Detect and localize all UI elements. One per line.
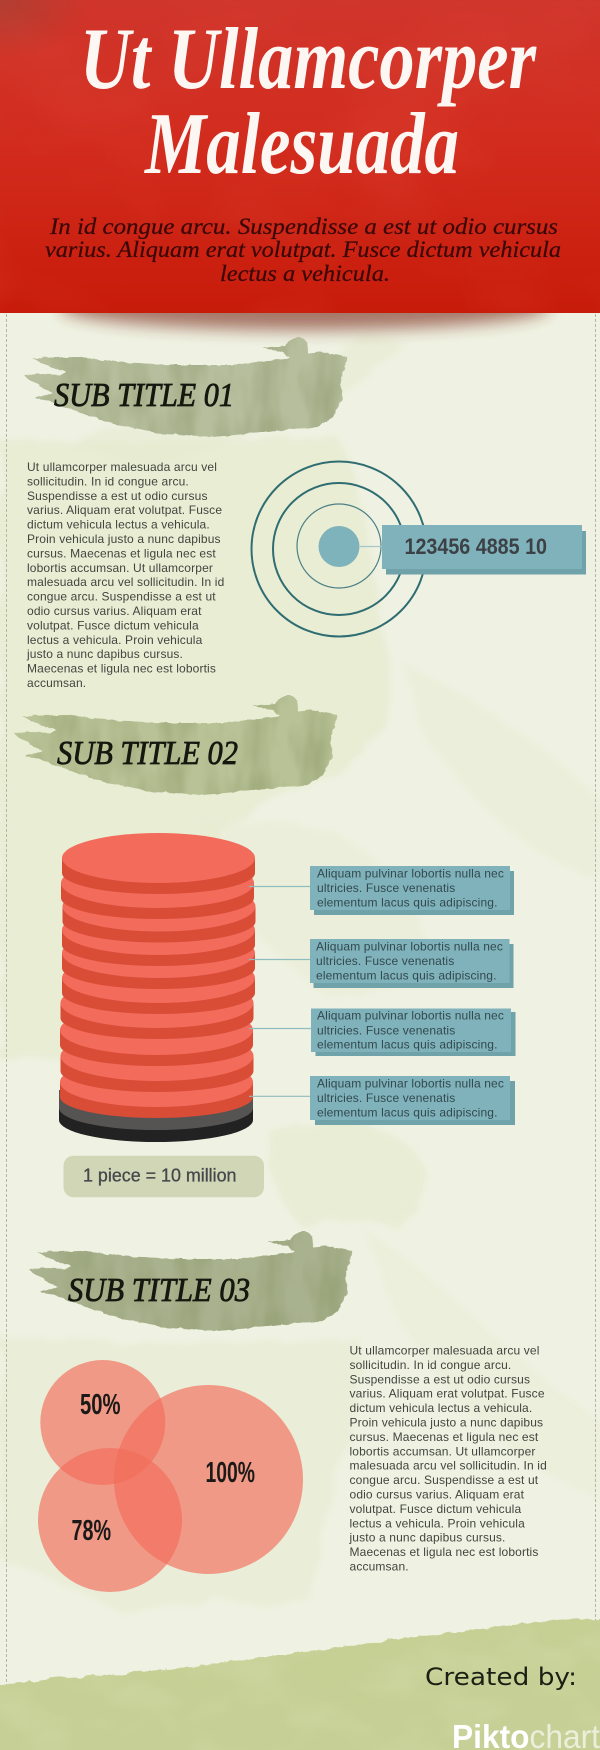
callout 2: Aliquam pulvinar lobortis nulla nec <box>316 940 503 954</box>
section 3 paragraph: Suspendisse a est ut odio cursus <box>350 1372 530 1386</box>
section 3 paragraph: justo a nunc dapibus cursus. <box>348 1531 506 1545</box>
section 3 paragraph: accumsan. <box>350 1560 409 1574</box>
section 1 paragraph: congue arcu. Suspendisse a est ut <box>27 590 216 604</box>
section 3 paragraph: varius. Aliquam erat volutpat. Fusce <box>350 1387 545 1401</box>
section 1 paragraph: varius. Aliquam erat volutpat. Fusce <box>27 503 222 517</box>
label 78%: 78% <box>72 1515 111 1547</box>
section 1 paragraph: lobortis accumsan. Ut ullamcorper <box>27 561 213 575</box>
section 1 paragraph: dictum vehicula lectus a vehicula. <box>27 518 210 532</box>
legend pill <box>64 1156 264 1197</box>
section 1 paragraph: Ut ullamcorper malesuada arcu vel <box>27 460 217 474</box>
callout 1: Aliquam pulvinar lobortis nulla nec <box>317 866 504 880</box>
venn diagram <box>38 1360 303 1592</box>
header description: In id congue arcu. Suspendisse a est ut odio cursus <box>49 214 558 239</box>
section 3 paragraph: congue arcu. Suspendisse a est ut <box>350 1473 539 1487</box>
callout 3: ultricies. Fusce venenatis <box>317 1024 455 1038</box>
stacked disc pictogram <box>59 833 256 1142</box>
circle 100% <box>114 1385 303 1574</box>
section 2 heading: SUB TITLE 02 <box>57 735 238 772</box>
callout 1 <box>249 866 514 915</box>
section 3 heading <box>29 1231 353 1331</box>
footer wash band <box>0 1618 600 1750</box>
section 1 paragraph: Maecenas et ligula nec est lobortis <box>27 662 216 676</box>
header banner <box>0 0 600 313</box>
main title <box>80 11 537 193</box>
discs <box>60 833 256 1118</box>
section 2 heading <box>14 695 338 795</box>
header description: varius. Aliquam erat volutpat. Fusce dictum vehicula <box>45 237 561 262</box>
section 3 paragraph: odio cursus varius. Aliquam erat <box>350 1488 525 1502</box>
section 1 paragraph: Suspendisse a est ut odio cursus <box>27 489 208 503</box>
circle 78% <box>38 1448 182 1592</box>
section 1 paragraph: justo a nunc dapibus cursus. <box>26 647 183 661</box>
section 3 paragraph: malesuada arcu vel sollicitudin. In id <box>350 1459 547 1473</box>
section 3 paragraph: sollicitudin. In id congue arcu. <box>350 1358 511 1372</box>
section 3 paragraph: Proin vehicula justo a nunc dapibus <box>350 1416 543 1430</box>
concentric target chart <box>252 462 426 636</box>
section 1 paragraph: Proin vehicula justo a nunc dapibus <box>27 532 221 546</box>
section 1 paragraph: volutpat. Fusce dictum vehicula <box>27 618 199 632</box>
number callout <box>382 525 586 574</box>
section 3 paragraph: cursus. Maecenas et ligula nec est <box>350 1430 539 1444</box>
header description <box>45 214 561 286</box>
section 1 paragraph: accumsan. <box>27 676 86 690</box>
callout 3 <box>249 1008 516 1056</box>
number callout: 123456 4885 10 <box>404 534 547 559</box>
callout 4: ultricies. Fusce venenatis <box>317 1091 455 1105</box>
section 1 paragraph: cursus. Maecenas et ligula nec est <box>27 546 216 560</box>
header shadow <box>54 313 556 342</box>
section 3 paragraph: volutpat. Fusce dictum vehicula <box>350 1502 521 1516</box>
callout 3: Aliquam pulvinar lobortis nulla nec <box>317 1009 504 1023</box>
legend pill: 1 piece = 10 million <box>83 1166 236 1186</box>
circle 50% <box>40 1360 165 1485</box>
section 3 paragraph: lectus a vehicula. Proin vehicula <box>350 1516 525 1530</box>
base plate <box>59 1086 253 1142</box>
section 1 heading <box>24 337 348 437</box>
main title: Malesuada <box>143 96 459 193</box>
label 50%: 50% <box>80 1389 121 1421</box>
section 1 paragraph: malesuada arcu vel sollicitudin. In id <box>27 575 224 589</box>
section 3 heading: SUB TITLE 03 <box>68 1272 250 1309</box>
created by label: Created by: <box>425 1663 577 1691</box>
header description: lectus a vehicula. <box>220 261 390 286</box>
callout 2 <box>249 939 514 988</box>
callout 2: ultricies. Fusce venenatis <box>316 954 454 968</box>
section 1 paragraph: odio cursus varius. Aliquam erat <box>27 604 202 618</box>
section 3 paragraph: dictum vehicula lectus a vehicula. <box>350 1401 532 1415</box>
callout 2: elementum lacus quis adipiscing. <box>316 969 497 983</box>
label 100%: 100% <box>206 1457 255 1489</box>
callout 4: elementum lacus quis adipiscing. <box>317 1106 498 1120</box>
callout 4: Aliquam pulvinar lobortis nulla nec <box>317 1077 504 1091</box>
callout 4 <box>249 1076 515 1125</box>
section 3 paragraph: Ut ullamcorper malesuada arcu vel <box>350 1344 540 1358</box>
section 1 paragraph: lectus a vehicula. Proin vehicula <box>27 633 203 647</box>
section 1 paragraph: sollicitudin. In id congue arcu. <box>27 474 189 488</box>
callout 3: elementum lacus quis adipiscing. <box>317 1038 498 1052</box>
section 3 paragraph: lobortis accumsan. Ut ullamcorper <box>350 1444 536 1458</box>
callout 1: elementum lacus quis adipiscing. <box>317 896 498 910</box>
callout 1: ultricies. Fusce venenatis <box>317 881 455 895</box>
section 3 paragraph: Maecenas et ligula nec est lobortis <box>350 1545 539 1559</box>
section 1 heading: SUB TITLE 01 <box>54 377 234 414</box>
dashed side borders <box>6 314 596 1690</box>
